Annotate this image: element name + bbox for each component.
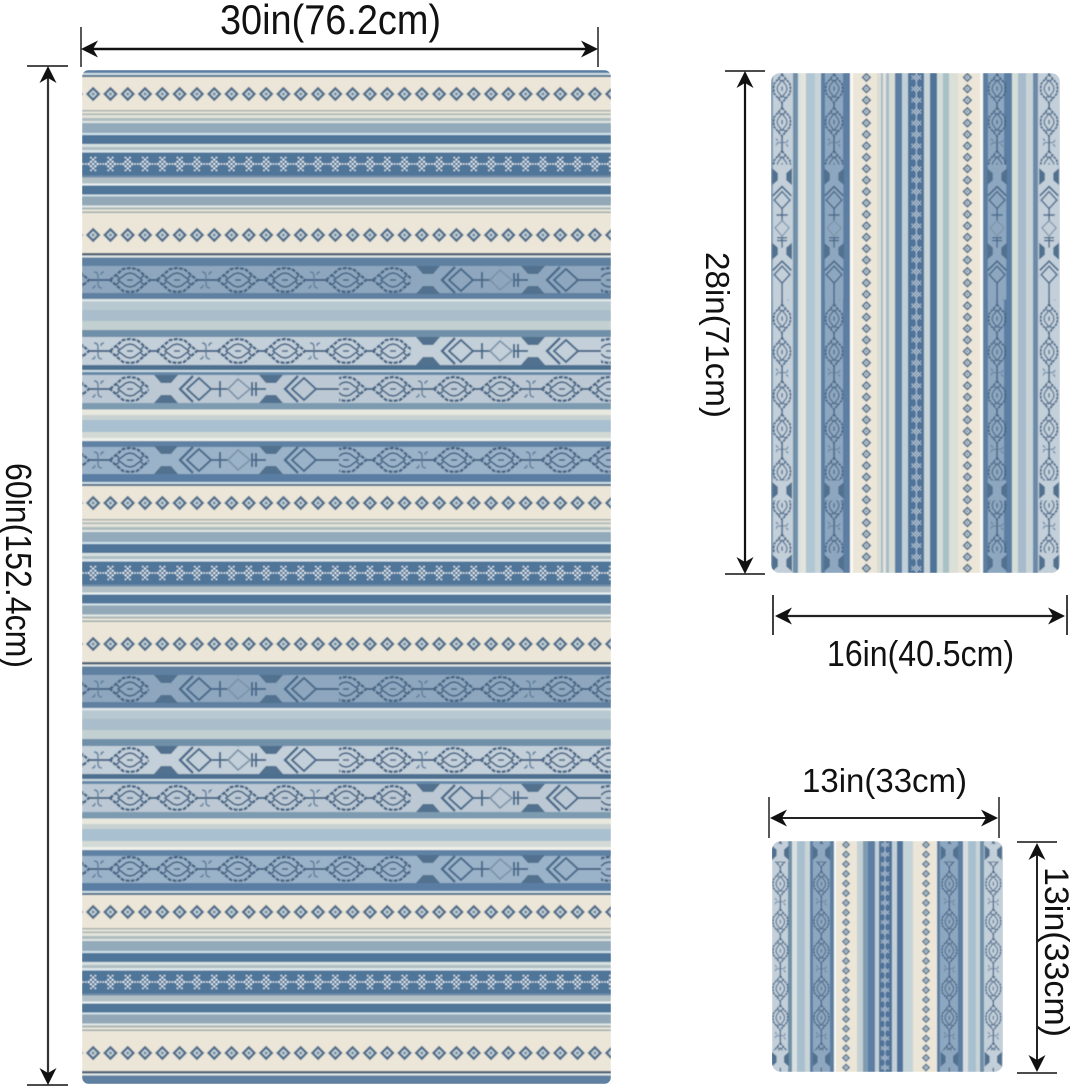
arrow: small towel height dimension bbox=[1017, 842, 1057, 1073]
label: small towel width: 13in(33cm) bbox=[802, 762, 967, 799]
ornament column 2 bbox=[824, 73, 844, 573]
stripe repeat: second period top bbox=[82, 479, 611, 675]
ornament band 8 bbox=[82, 855, 611, 883]
arrow: medium towel height dimension bbox=[725, 71, 765, 574]
ornament column 3 bbox=[987, 73, 1007, 573]
arrow: small towel width dimension bbox=[769, 797, 999, 838]
stripe repeat: first period top bbox=[82, 70, 611, 266]
label: medium towel width: 16in(40.5cm) bbox=[827, 633, 1014, 674]
ornament column 4 bbox=[1039, 73, 1059, 573]
dotted diamond row 2 bbox=[82, 565, 611, 581]
ornament column 1 bbox=[772, 841, 789, 1072]
large towel: 30in by 60in striped bath towel bbox=[82, 70, 611, 1084]
ornament band 7 bbox=[82, 784, 611, 812]
diamond row 3 bbox=[82, 495, 611, 511]
dotted diamond row 3 bbox=[82, 974, 611, 990]
arrow: large towel height dimension bbox=[27, 66, 68, 1085]
ornament band 2 bbox=[82, 337, 611, 365]
vertical stripes bbox=[772, 841, 1003, 1072]
ornament band 4 bbox=[82, 446, 611, 474]
ornament column 2 bbox=[813, 841, 830, 1072]
diamond row 4 bbox=[82, 636, 611, 652]
diamond row 5 bbox=[82, 904, 611, 920]
arrow: medium towel width dimension bbox=[773, 595, 1067, 635]
dotted diamond row 1 bbox=[82, 156, 611, 172]
diamond column 2 bbox=[922, 841, 930, 1072]
medium towel: 16in by 28in hand towel with vertical stripes bbox=[771, 73, 1060, 573]
dotted diamond column bbox=[910, 73, 922, 573]
stripe repeat: third period top bbox=[82, 888, 611, 1084]
small towel: 13in by 13in washcloth with vertical stripes bbox=[772, 841, 1003, 1072]
ornament band 6 bbox=[82, 746, 611, 774]
ornament column 1 bbox=[772, 73, 792, 573]
ornament band 1 bbox=[82, 266, 611, 294]
diamond column 2 bbox=[962, 73, 973, 573]
diamond column 1 bbox=[861, 73, 872, 573]
ornament band 3 bbox=[82, 375, 611, 403]
ornament column 3 bbox=[941, 841, 958, 1072]
label: medium towel height: 28in(71cm) bbox=[699, 252, 736, 418]
diamond row 1 bbox=[82, 86, 611, 102]
stripe repeat: second period bottom bbox=[82, 675, 611, 888]
label: small towel height: 13in(33cm) bbox=[1037, 867, 1075, 1037]
diamond row 6 bbox=[82, 1045, 611, 1061]
diamond column 1 bbox=[842, 841, 850, 1072]
stripe repeat: first period bottom bbox=[82, 266, 611, 479]
diamond row 2 bbox=[82, 227, 611, 243]
dotted diamond column bbox=[880, 841, 890, 1072]
arrow: large towel width dimension bbox=[81, 27, 598, 67]
ornament band 5 bbox=[82, 675, 611, 703]
ornament column 4 bbox=[985, 841, 1002, 1072]
vertical stripes bbox=[771, 73, 1060, 573]
